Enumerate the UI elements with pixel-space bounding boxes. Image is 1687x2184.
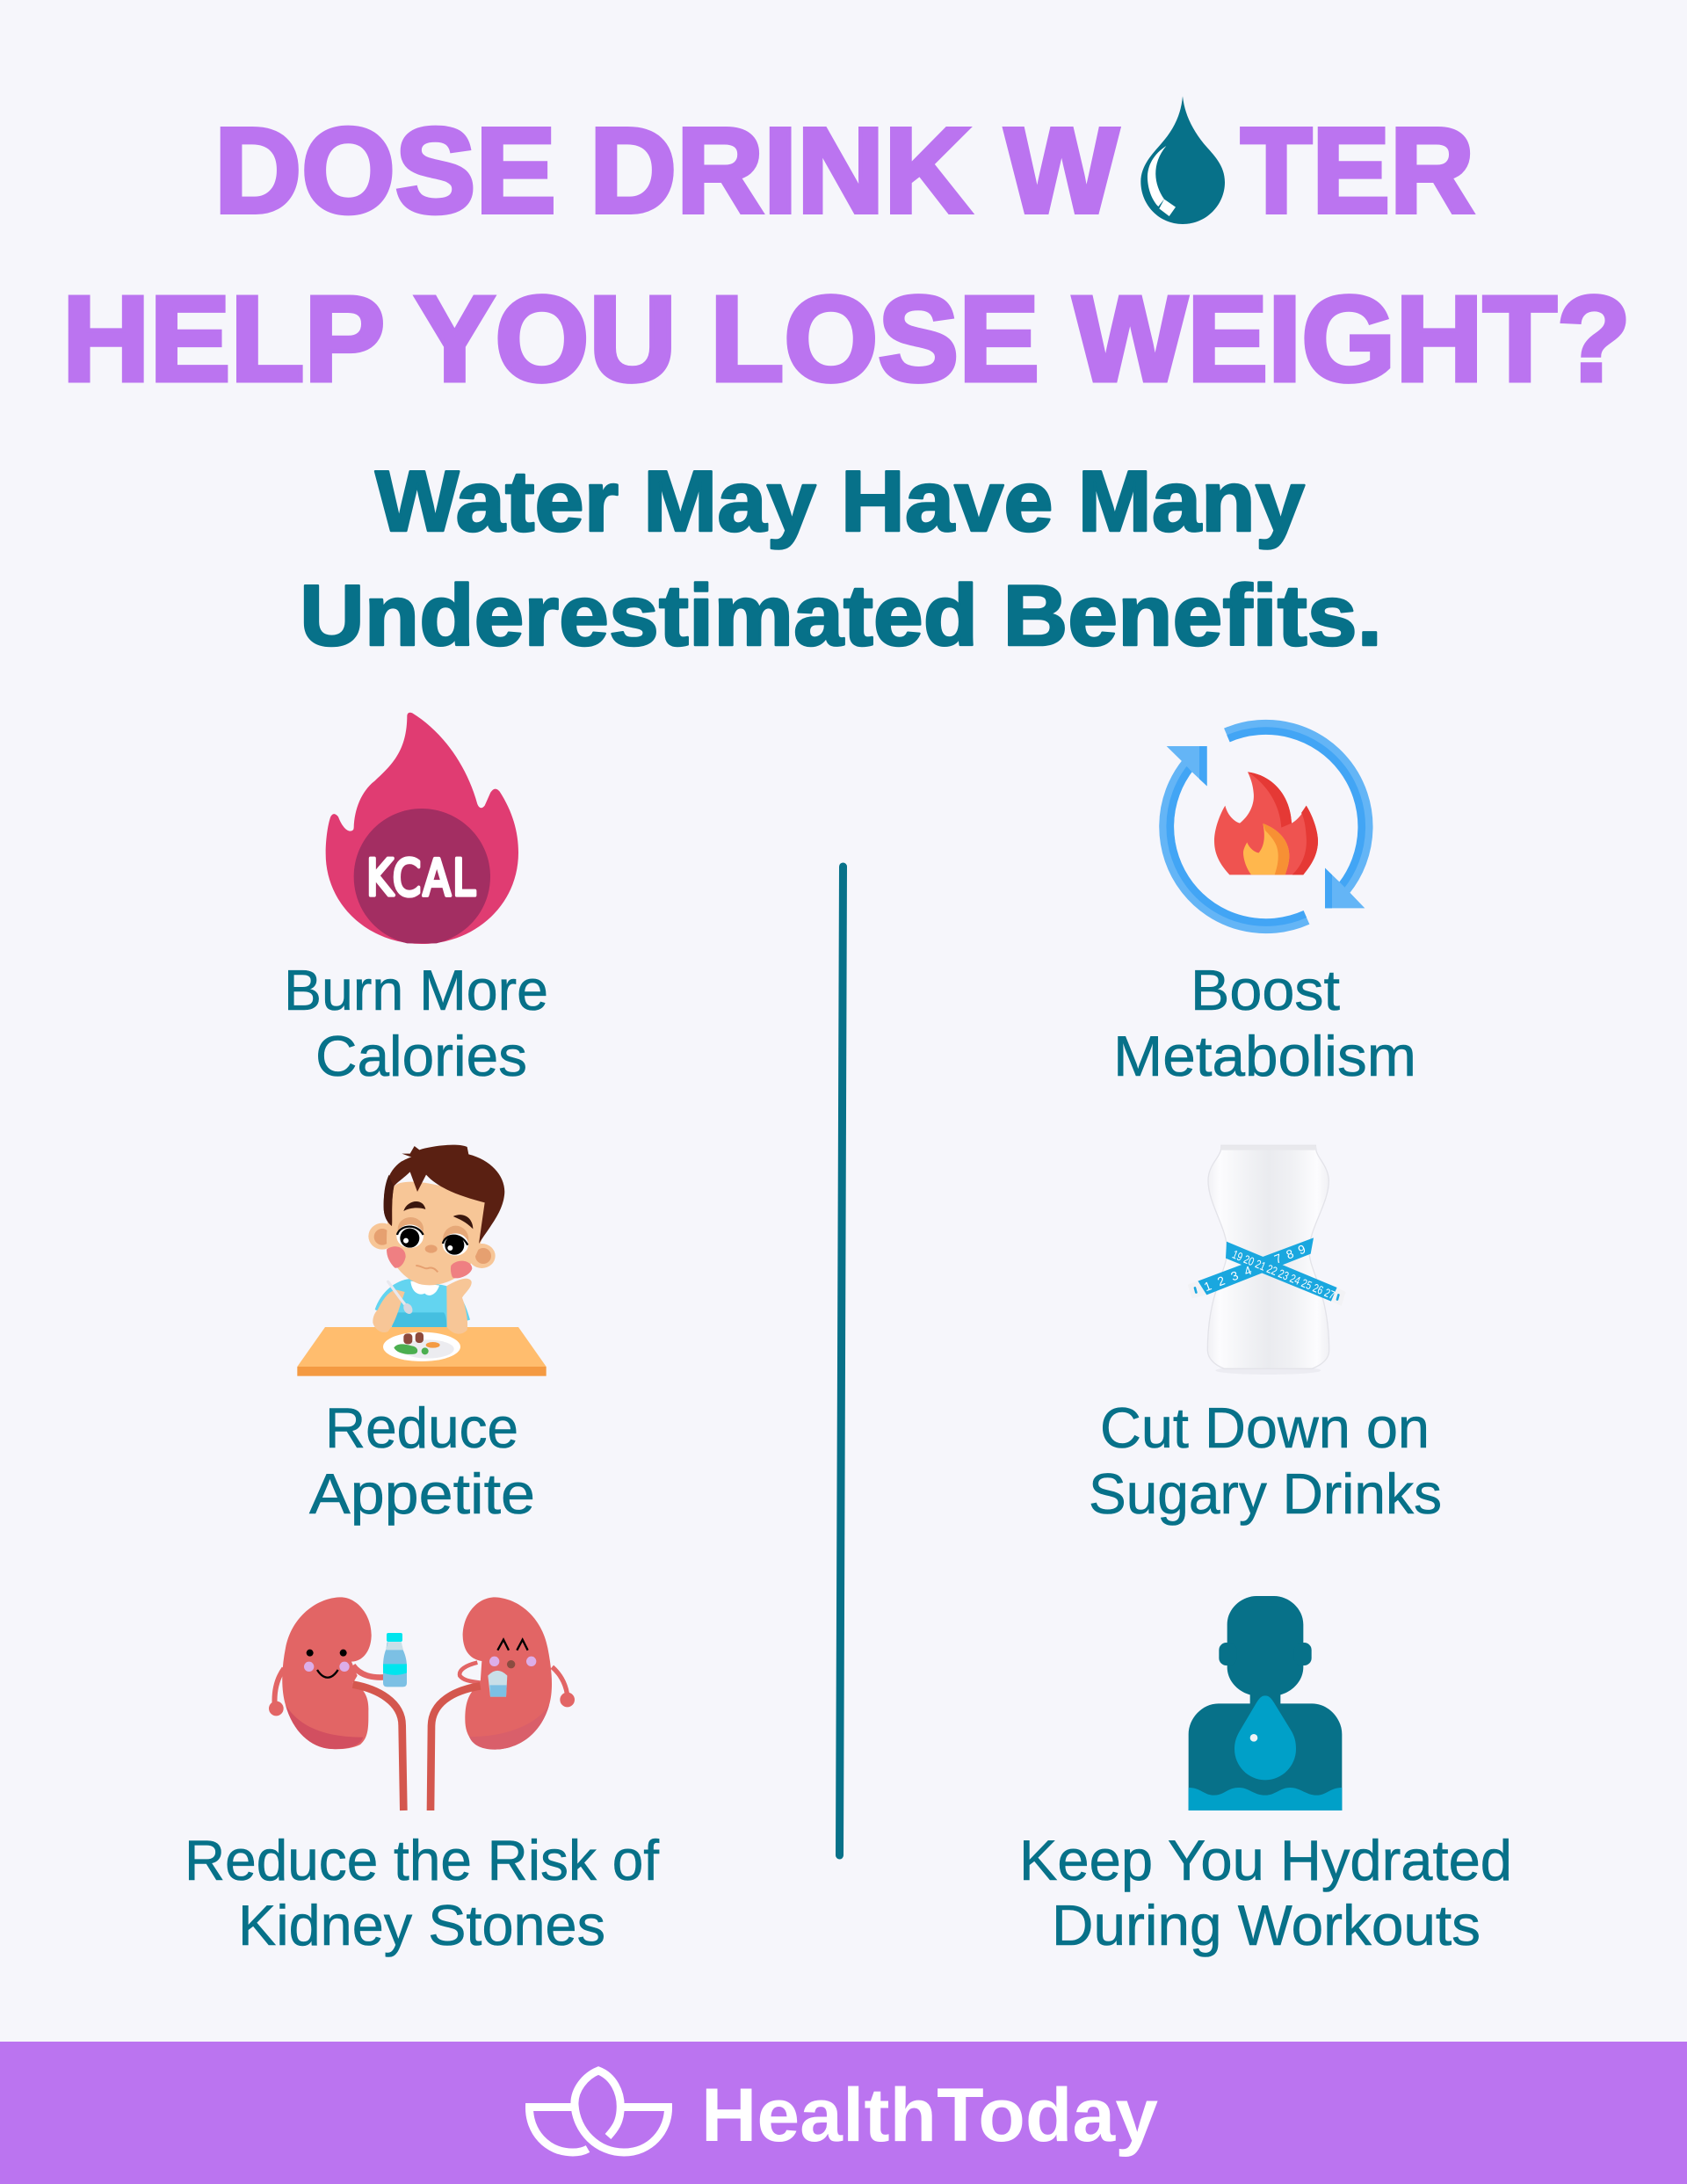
label: keep you hydrated during workouts (1019, 1828, 1512, 1957)
label: reduce appetite: Appetite (309, 1462, 535, 1526)
icon: hourglass can with measuring tape: 1 2 3 4 (1202, 1263, 1254, 1294)
label: burn more calories: Calories (315, 1024, 527, 1088)
label: reduce the risk of kidney stones (185, 1828, 660, 1957)
label: keep you hydrated during workouts: Keep You Hydrated (1019, 1828, 1512, 1892)
subtitle: Water May Have Many (375, 453, 1305, 549)
label: boost metabolism: Boost (1191, 958, 1340, 1022)
label: keep you hydrated during workouts: During Workouts (1052, 1893, 1481, 1957)
icon: kcal flame (326, 713, 518, 944)
title (62, 104, 1631, 407)
icon: water drop in title (1140, 96, 1225, 224)
label: cut down on sugary drinks: Sugary Drinks (1089, 1462, 1442, 1526)
icon: boy at table with low appetite (297, 1145, 547, 1376)
footer band (0, 2042, 1687, 2184)
label: cut down on sugary drinks (1089, 1396, 1442, 1526)
icon: hourglass can with measuring tape (1188, 1145, 1346, 1375)
icon: smiling kidneys with water (269, 1597, 575, 1810)
divider (840, 867, 844, 1855)
icon: hourglass can with measuring tape: 19 20 21 22 23 24 25 26 27 (1230, 1248, 1336, 1302)
subtitle: Underestimated Benefits. (300, 567, 1382, 664)
label: boost metabolism (1113, 958, 1416, 1088)
label: boost metabolism: Metabolism (1113, 1024, 1416, 1088)
title: HELP YOU LOSE WEIGHT? (62, 272, 1631, 407)
label: burn more calories (284, 958, 548, 1088)
icon: kcal flame: KCAL (366, 849, 477, 908)
label: reduce the risk of kidney stones: Reduce the Risk of (185, 1828, 660, 1892)
subtitle (300, 453, 1382, 664)
label: reduce appetite (309, 1396, 535, 1526)
label: reduce the risk of kidney stones: Kidney Stones (238, 1893, 605, 1957)
icon: person with water drop and waves (1189, 1596, 1342, 1810)
label: burn more calories: Burn More (284, 958, 548, 1022)
footer logo: lotus (529, 2071, 669, 2152)
label: cut down on sugary drinks: Cut Down on (1100, 1396, 1430, 1460)
icon: metabolism cycle with flame (1167, 727, 1365, 926)
footer brand name: HealthToday (701, 2073, 1158, 2158)
icon: hourglass can with measuring tape: 7 8 9 (1272, 1242, 1307, 1266)
title: DOSE DRINK W (214, 104, 1119, 239)
title: TER (1241, 104, 1474, 239)
label: reduce appetite: Reduce (325, 1396, 518, 1460)
